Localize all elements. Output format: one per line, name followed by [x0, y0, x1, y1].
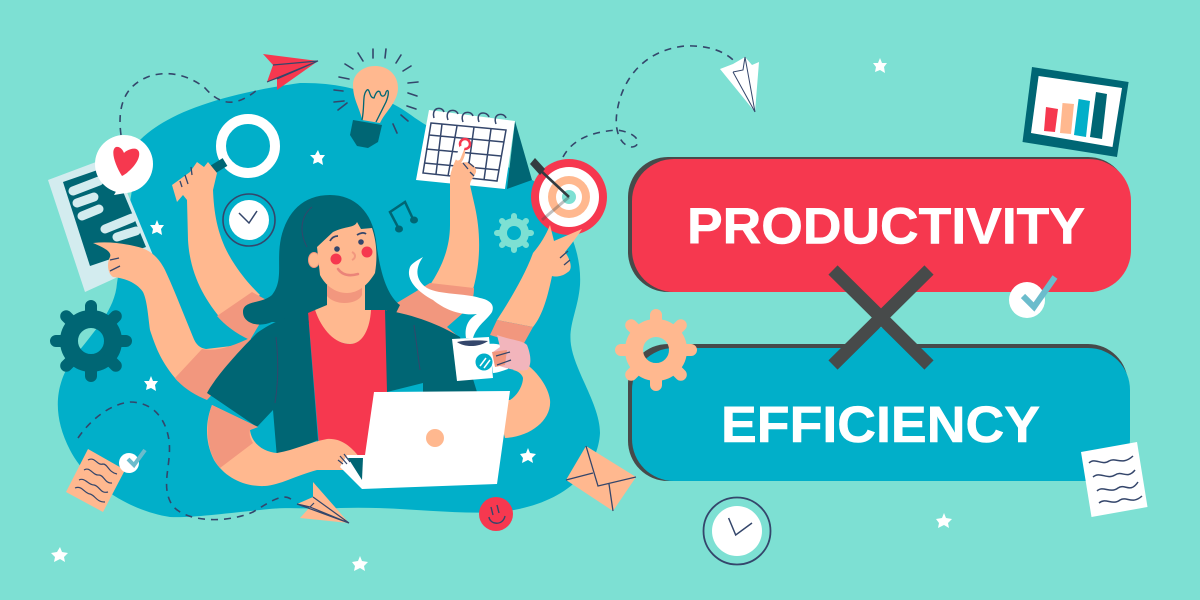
icon: target with arrow [530, 158, 607, 235]
icon: paper note right [1081, 442, 1148, 517]
icon: envelope [566, 446, 636, 511]
forearm behind cup [495, 363, 550, 438]
panel: efficiency [628, 327, 1130, 481]
coffee steam [409, 257, 493, 338]
arm: holding magnifying glass [172, 119, 275, 340]
dashed flight path: bottom left [78, 402, 292, 520]
icon: sticky note [66, 449, 125, 512]
icon: analog clock on blob [223, 194, 275, 246]
icon: orange gear [621, 315, 691, 385]
efficiency label: EFFICIENCY [721, 396, 1040, 453]
stars [51, 58, 952, 571]
icon: white paper plane [720, 57, 759, 112]
arm: typing on laptop [207, 405, 360, 486]
face [302, 207, 376, 293]
icon: calendar [416, 108, 532, 189]
dashed flight path: top right [563, 46, 736, 157]
productivity label: PRODUCTIVITY [687, 198, 1085, 254]
background blob [58, 83, 600, 517]
hand holding mug [492, 335, 530, 371]
arm: pointing at tablet [93, 242, 260, 400]
hair [243, 195, 400, 325]
arm: pointing at target [490, 225, 582, 345]
dashed flight path: top left [120, 74, 257, 135]
icon: tan paper plane [297, 482, 349, 523]
panel: productivity [628, 157, 1131, 309]
icon: small teal gear [497, 216, 531, 250]
jacket [207, 310, 477, 477]
icon: music note [390, 202, 418, 232]
icon: checkmark badge on blob [119, 450, 145, 473]
icon: smile badge [479, 497, 513, 531]
icon: speech bubble with heart [95, 135, 153, 195]
icon: light bulb [334, 49, 418, 148]
coffee mug [452, 337, 508, 381]
arm: touching calendar [385, 139, 479, 345]
neck and chest [315, 278, 371, 344]
icon: bar chart card [1022, 67, 1129, 157]
icon: clock bottom [704, 498, 770, 564]
woman with six arms [93, 119, 582, 489]
multiply sign [833, 270, 929, 365]
icon: dark gear [56, 306, 126, 376]
icon: red paper plane [263, 54, 318, 90]
laptop [338, 391, 510, 489]
red top [308, 310, 387, 460]
icon: tablet with chat lines [48, 156, 155, 292]
icon: check badge right [1009, 277, 1055, 318]
